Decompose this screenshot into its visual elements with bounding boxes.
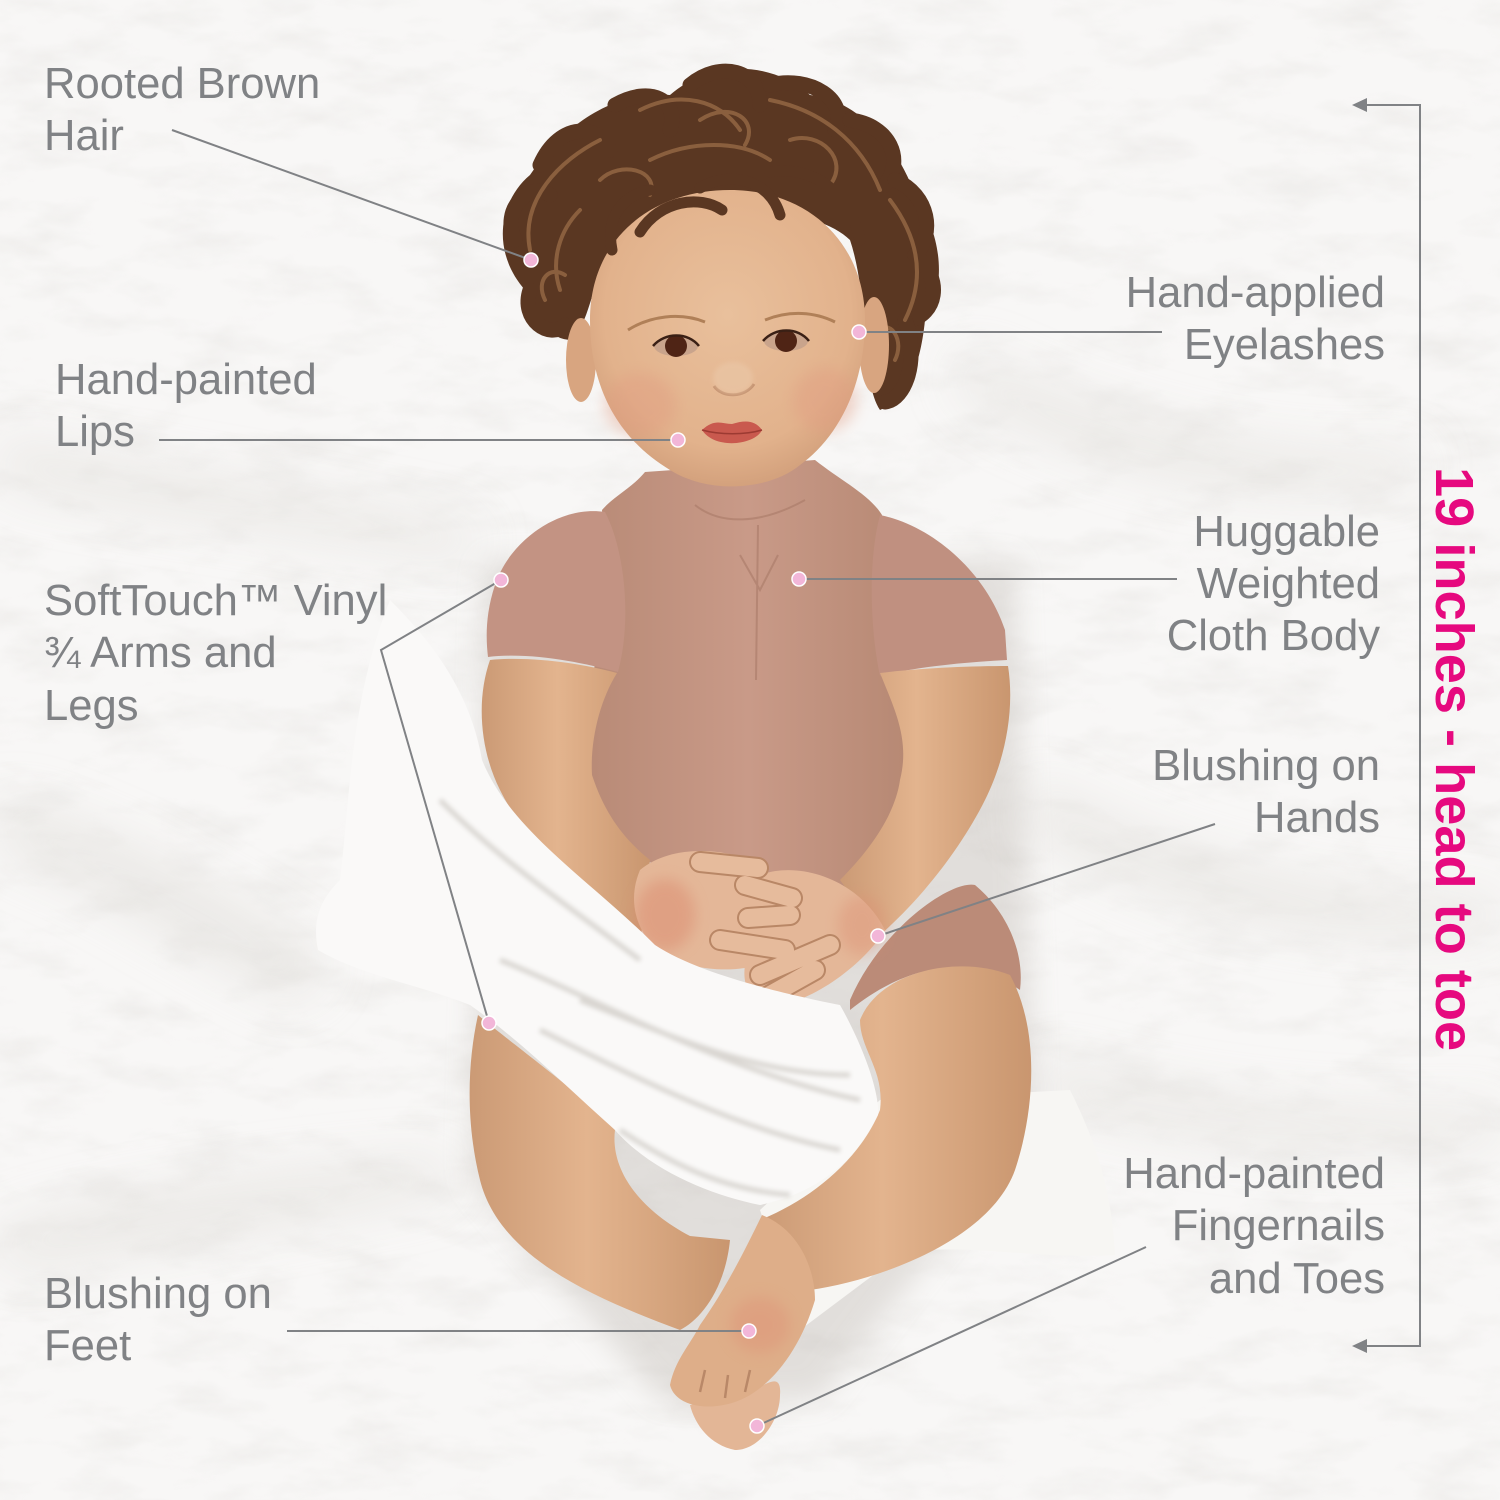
callout lines: [159, 130, 1215, 1426]
label: hand-applied eyelashes: Eyelashes: [1184, 321, 1385, 369]
label: blushing on feet: Blushing on: [44, 1270, 272, 1318]
label: huggable weighted cloth body: Huggable: [1193, 508, 1380, 556]
label: softtouch vinyl: ¾ Arms and: [44, 629, 277, 677]
curl highlights: [528, 100, 917, 360]
white blanket over the leg: [316, 600, 878, 1205]
right hand: [744, 870, 885, 1005]
shadow under doll: [470, 560, 1035, 1400]
fingers: [700, 862, 830, 998]
label: huggable weighted cloth body: Weighted: [1197, 560, 1380, 608]
label: blushing on feet: Feet: [44, 1322, 131, 1370]
foot upper: [670, 1215, 815, 1407]
curls around hair edge: [511, 71, 934, 402]
label: blushing on hands: Hands: [1254, 794, 1380, 842]
callout dots: [482, 253, 885, 1433]
label: hand-painted lips: Hand-painted: [55, 356, 317, 404]
right sleeve: [872, 515, 1007, 676]
left sleeve: [487, 511, 625, 672]
mouth: [702, 422, 762, 443]
label: hand-painted fingernails and toes: Fingernails: [1172, 1202, 1385, 1250]
nose: [714, 384, 754, 395]
label: hand-painted fingernails and toes: and Toes: [1209, 1255, 1385, 1303]
left hand: [634, 851, 786, 969]
foot lower: [690, 1381, 780, 1450]
label: blushing on hands: Blushing on: [1152, 742, 1380, 790]
label: hand-painted fingernails and toes: Hand-painted: [1123, 1150, 1385, 1198]
right arm: [840, 666, 1010, 935]
left arm: [482, 659, 650, 945]
torso: [584, 460, 912, 900]
label: huggable weighted cloth body: Cloth Body: [1167, 612, 1380, 660]
doll: [316, 69, 1115, 1450]
bloomers: [850, 885, 1021, 1010]
height label: 19 inches - head to toe: [1424, 467, 1484, 1051]
face: [590, 190, 865, 486]
right leg: [760, 966, 1031, 1290]
hair back: [503, 69, 939, 410]
label: hand-applied eyelashes: Hand-applied: [1126, 269, 1385, 317]
white muslin under right leg: [760, 1090, 1115, 1330]
height bracket arrow: [1352, 98, 1420, 1353]
label: hand-painted lips: Lips: [55, 408, 135, 456]
label: softtouch vinyl: SoftTouch™ Vinyl: [44, 577, 387, 625]
eyebrows: [628, 313, 835, 330]
left leg: [470, 1015, 730, 1330]
hair front curls: [611, 171, 860, 250]
torso seam: [695, 500, 805, 680]
label: softtouch vinyl: Legs: [44, 682, 139, 730]
eyes: [654, 336, 698, 356]
label: rooted brown hair: Hair: [44, 112, 124, 160]
ears: [566, 318, 596, 402]
label: rooted brown hair: Rooted Brown: [44, 60, 320, 108]
